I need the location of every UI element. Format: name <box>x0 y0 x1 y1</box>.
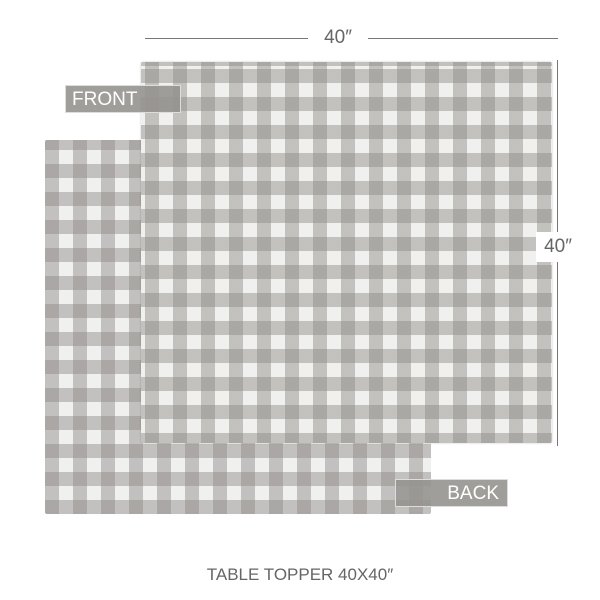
label: back <box>395 479 508 507</box>
label: front <box>65 85 181 113</box>
title: TABLE TOPPER 40X40″ <box>207 565 393 584</box>
panel: back cloth <box>45 140 431 514</box>
dimension: height 40: 40″ <box>544 236 572 257</box>
panel: front cloth <box>141 62 552 443</box>
dimension: width 40: 40″ <box>324 27 352 48</box>
label: front: FRONT <box>72 89 137 110</box>
label: back: BACK <box>447 483 499 504</box>
